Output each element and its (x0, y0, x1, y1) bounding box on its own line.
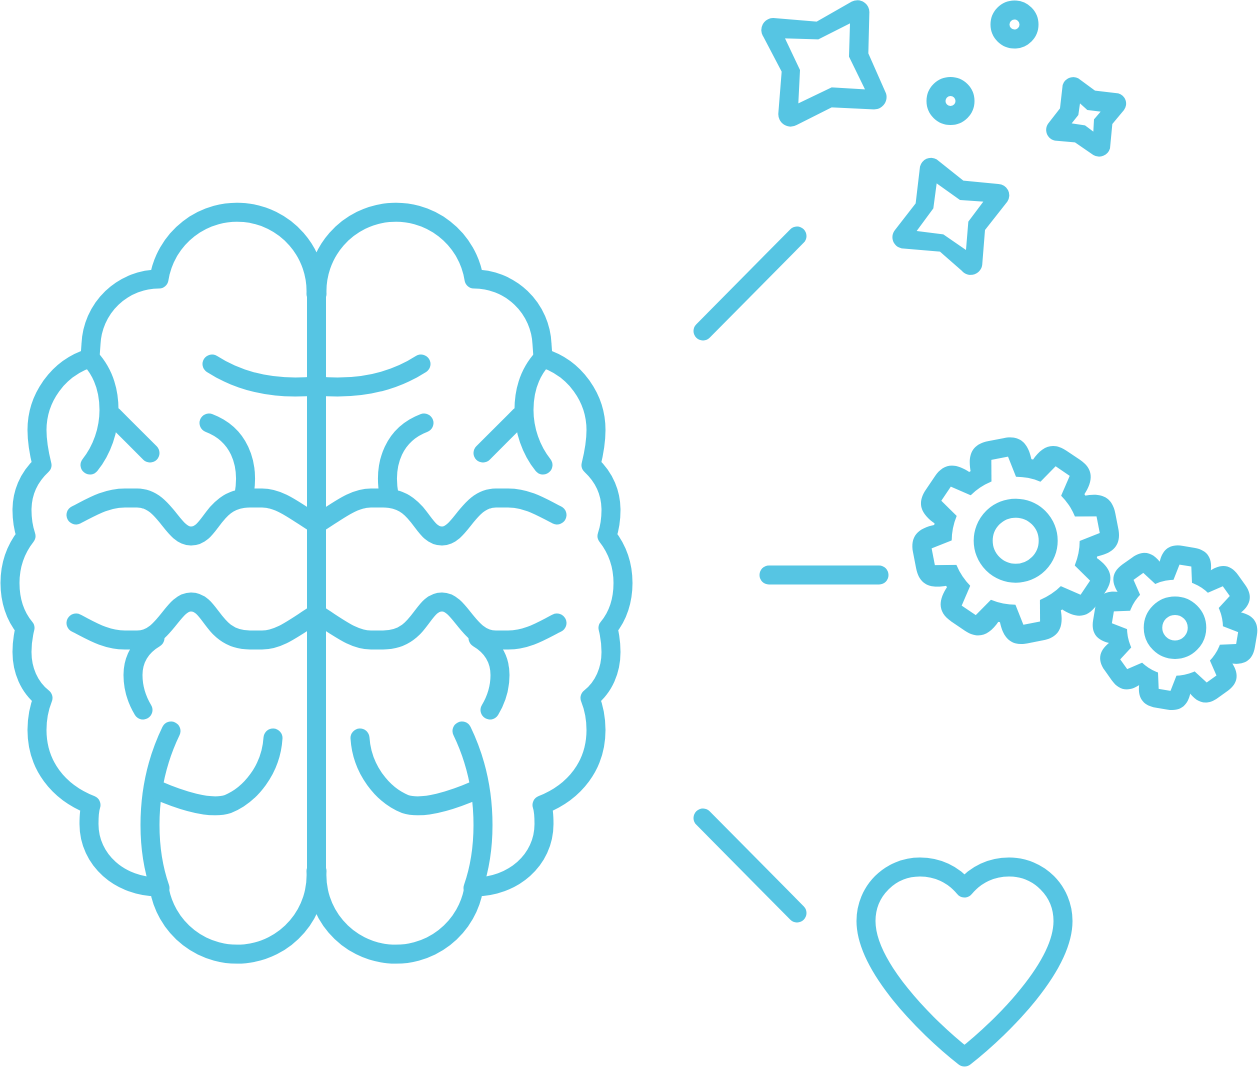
lower sparkle star (892, 158, 1009, 275)
icon: sparkle stars and dots (761, 0, 1126, 275)
dot top (1000, 10, 1029, 39)
icon: brain (10, 212, 623, 954)
connector line: to gears (769, 566, 879, 584)
brain right hemisphere (317, 212, 623, 954)
large sparkle star (761, 0, 887, 127)
dot middle (936, 86, 965, 116)
icon: large gear (909, 434, 1123, 648)
connector line: to heart (703, 818, 797, 913)
icon: small gear (1090, 543, 1258, 713)
small sparkle star (1046, 77, 1126, 157)
icon: heart (866, 867, 1063, 1057)
brain centre divider (307, 285, 326, 885)
brain left hemisphere (10, 212, 316, 954)
connector line: to stars (703, 236, 797, 331)
